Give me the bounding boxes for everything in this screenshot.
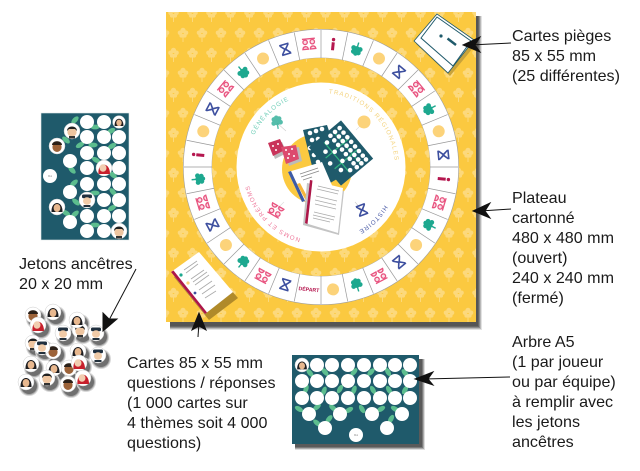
poster shadow — [295, 359, 425, 450]
segment: sun — [401, 225, 435, 258]
segment: info — [429, 164, 458, 182]
label: trap cards: 85 x 55 mm — [512, 47, 596, 65]
segment: start: DÉPART — [298, 284, 321, 294]
theme label: Généalogie: GÉNÉALOGIE — [251, 96, 288, 134]
centre yellow disc — [282, 134, 352, 204]
token faces — [18, 304, 106, 392]
theme label: Traditions régionales: TRADITIONS RÉGIONALES — [329, 89, 399, 160]
segment: pink figures — [207, 75, 241, 109]
label: A5 tree: Arbre A5 — [512, 333, 575, 351]
front mini board — [309, 120, 373, 186]
arrow: question cards — [192, 313, 206, 337]
arrow: token pile — [103, 269, 136, 331]
segment: info — [184, 152, 213, 170]
label: trap cards — [512, 27, 620, 85]
empty ancestor slots — [43, 115, 126, 238]
label: board: (ouvert) — [512, 249, 567, 267]
segment: hourglass — [386, 242, 418, 275]
leaves — [294, 367, 410, 428]
empty ancestor slots — [295, 358, 417, 442]
segment: start — [297, 274, 324, 304]
mini question cards — [288, 162, 344, 235]
label: question cards: (1 000 cartes sur — [127, 394, 248, 412]
label: A5 tree: (1 par joueur — [512, 353, 603, 371]
segment: tree — [340, 33, 366, 65]
theme label: Histoire: HISTOIRE — [359, 206, 388, 234]
trap cards on the board — [414, 14, 477, 76]
label: ancestor tokens — [19, 255, 133, 293]
segment: tree — [185, 172, 214, 194]
segment: sun — [421, 115, 453, 141]
label: board: 240 x 240 mm — [512, 269, 614, 287]
player name text: Moi — [354, 434, 358, 437]
token shadows — [19, 306, 111, 398]
player number text: Moi — [48, 175, 52, 178]
ancestor tokens placed on the poster — [49, 116, 127, 239]
label: ancestor tokens: 20 x 20 mm — [19, 275, 103, 293]
segment: tree — [230, 247, 263, 281]
segment: tree — [414, 206, 448, 236]
theme icon: hourglass — [355, 202, 368, 217]
segment: hourglass — [379, 53, 411, 86]
tree poster on the left — [41, 113, 129, 240]
label: A5 tree: les jetons — [512, 413, 580, 431]
white central disc — [236, 82, 406, 252]
pile of ancestor tokens — [18, 304, 111, 398]
dice — [268, 139, 302, 166]
game board — [166, 12, 482, 330]
segment: sun — [360, 40, 391, 74]
arrow: A5 tree — [415, 372, 510, 385]
label: board — [512, 189, 614, 307]
segment: pink figures — [396, 70, 431, 103]
placed token — [295, 358, 309, 372]
tree poster at the bottom (A5) — [292, 355, 425, 450]
segment: sun — [326, 274, 348, 303]
segment: pink figures — [189, 192, 221, 219]
segment: hourglass — [194, 98, 228, 128]
segment: tree — [410, 91, 444, 121]
label: question cards: 4 thèmes soit 4 000 — [127, 414, 267, 432]
label: question cards: questions) — [127, 434, 201, 452]
arrow: board — [473, 203, 511, 218]
label: board: cartonné — [512, 209, 575, 227]
segment: tree — [347, 267, 373, 299]
label: trap cards: (25 différentes) — [512, 67, 620, 85]
question cards pile on the board — [171, 252, 238, 320]
segment: pink figures — [294, 31, 317, 60]
label: question cards: questions / réponses — [127, 374, 276, 392]
leaves — [61, 115, 118, 227]
label: board: 480 x 480 mm — [512, 229, 614, 247]
segment: hourglass — [269, 35, 294, 67]
theme label: Noms et prénoms: NOMS ET PRÉNOMS — [246, 186, 300, 242]
mini tree boards — [303, 120, 373, 190]
card with crimson stripe — [303, 180, 344, 235]
segment: sun — [245, 44, 275, 78]
segment: pink figures — [423, 186, 455, 213]
track segments — [184, 30, 458, 304]
inner yellow band pattern — [212, 58, 430, 276]
theme icon: tree — [270, 114, 286, 131]
segment: hourglass — [277, 269, 302, 301]
segment: hourglass — [198, 214, 232, 243]
label: question cards — [127, 354, 276, 452]
label: A5 tree: à remplir avec — [512, 393, 613, 411]
segment: pink figures — [366, 256, 397, 290]
board shadow — [170, 16, 482, 330]
arrow: trap cards — [463, 37, 511, 52]
label: question cards: Cartes 85 x 55 mm — [127, 354, 263, 372]
segment: info — [318, 30, 336, 59]
back mini board — [303, 125, 344, 190]
label: trap cards: Cartes pièges — [512, 27, 611, 45]
segment: sun — [187, 122, 219, 148]
segment: tree — [224, 58, 257, 92]
segment: hourglass — [428, 140, 457, 161]
label: ancestor tokens: Jetons ancêtres — [19, 255, 133, 273]
board background with tree pattern — [166, 12, 476, 322]
label: A5 tree — [512, 333, 616, 451]
theme icon: pink figures — [267, 202, 284, 218]
label: board: Plateau — [512, 189, 567, 207]
label: board: (fermé) — [512, 289, 564, 307]
card with blue stripe — [288, 162, 334, 202]
theme icon: sun — [356, 116, 370, 130]
label: A5 tree: ou par équipe) — [512, 373, 616, 391]
label: A5 tree: ancêtres — [512, 433, 574, 451]
segment: pink figures — [251, 260, 282, 294]
track ring — [183, 29, 459, 305]
segment: sun — [212, 231, 246, 264]
